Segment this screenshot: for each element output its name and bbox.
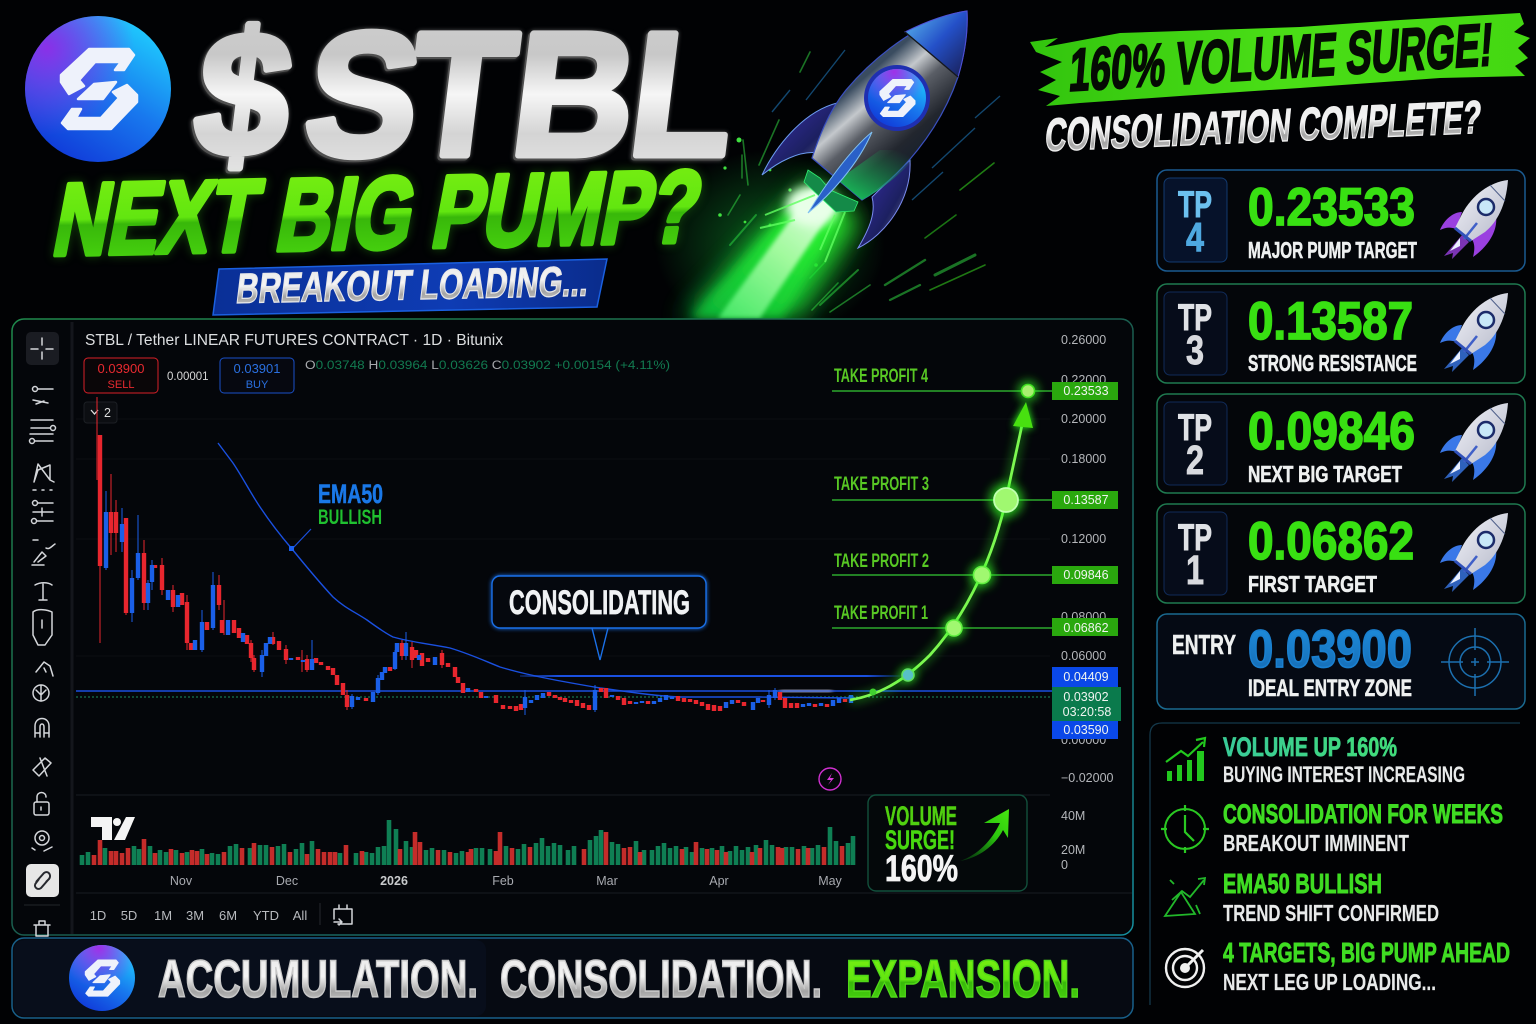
panel: TP1 target: TP xyxy=(1178,517,1212,558)
buy box: BUY xyxy=(246,379,269,391)
title: $STBL: $STBL xyxy=(185,0,747,193)
sell box: SELL xyxy=(108,379,134,391)
price tags xyxy=(1052,382,1121,739)
panel: entry: ENTRY xyxy=(1172,629,1236,660)
panel: TP4 target: MAJOR PUMP TARGET xyxy=(1248,237,1417,263)
panel: entry xyxy=(1157,614,1525,709)
range selector: 5D xyxy=(121,908,137,923)
key point: volume up xyxy=(1166,732,1465,787)
sell box: 0.03900 xyxy=(98,361,144,376)
price axis labels: 0.08000 xyxy=(1061,610,1106,624)
banner: accumulation consolidation expansion: EXPANSION. xyxy=(846,950,1080,1009)
callout: volume surge xyxy=(868,795,1027,891)
take profit levels: TAKE PROFIT 3 xyxy=(834,474,929,495)
key point: four targets: NEXT LEG UP LOADING... xyxy=(1223,969,1436,995)
candlesticks xyxy=(97,397,851,715)
panel: entry: 0.03900 xyxy=(1248,620,1412,679)
callout: volume surge: 160% xyxy=(885,848,958,889)
rocket exhaust flame xyxy=(680,180,860,318)
range selector: 1D xyxy=(90,908,106,923)
callout: consolidating xyxy=(492,576,706,660)
banner logo coin xyxy=(69,945,135,1011)
panel: TP3 target: STRONG RESISTANCE xyxy=(1248,350,1417,376)
panel: TP1 target: 0.06862 xyxy=(1248,512,1414,571)
panel: TP4 target: 0.23533 xyxy=(1248,178,1415,237)
price tags: 0.06862 xyxy=(1063,621,1109,635)
key point: consolidation: BREAKOUT IMMINENT xyxy=(1223,830,1409,856)
panel: TP1 target xyxy=(1157,504,1525,603)
key point: four targets xyxy=(1166,937,1510,995)
time axis: May xyxy=(818,874,843,888)
range selector xyxy=(90,903,352,925)
headline: next big pump: NEXT BIG PUMP? xyxy=(46,149,711,277)
price tags: 0.03590 xyxy=(1063,723,1109,737)
buy box xyxy=(220,358,294,393)
icon: blue rocket xyxy=(1440,293,1508,372)
panel: key points xyxy=(1150,723,1520,1005)
panel: TP2 target: NEXT BIG TARGET xyxy=(1248,461,1402,487)
price axis labels: 0.26000 xyxy=(1061,333,1106,347)
price axis labels: 0.20000 xyxy=(1061,412,1106,426)
buy box: 0.03901 xyxy=(234,361,280,376)
panel: TP4 target: 4 xyxy=(1186,214,1204,260)
take profit levels: TAKE PROFIT 4 xyxy=(834,366,928,387)
volume axis labels xyxy=(1061,809,1085,872)
volume bars xyxy=(82,820,853,865)
EMA50 bullish label xyxy=(318,479,383,529)
key point: EMA50 bullish xyxy=(1165,868,1439,926)
price axis labels: 0.06000 xyxy=(1061,649,1106,663)
price axis labels: 0.12000 xyxy=(1061,532,1106,546)
badge: breakout loading: BREAKOUT LOADING... xyxy=(234,258,591,312)
time axis: 2026 xyxy=(380,874,408,888)
price axis labels: −0.02000 xyxy=(1061,771,1114,785)
panel: TP3 target: TP xyxy=(1178,297,1212,338)
take profit levels: TAKE PROFIT 1 xyxy=(834,603,928,624)
time axis xyxy=(170,874,843,888)
banner: accumulation consolidation expansion: CONSOLIDATION. xyxy=(500,950,822,1009)
range selector: All xyxy=(293,908,307,923)
icon: crosshair xyxy=(1441,628,1509,696)
price axis labels xyxy=(1061,333,1114,785)
panel: TP2 target: 2 xyxy=(1186,437,1204,483)
panel: TP2 target xyxy=(1157,394,1525,493)
price tags: 0.13587 xyxy=(1063,493,1109,507)
price axis labels: 0.22000 xyxy=(1061,373,1106,387)
badge: breakout loading xyxy=(213,258,607,315)
key point: consolidation xyxy=(1161,799,1503,856)
TradingView logo xyxy=(91,817,135,840)
icon: purple rocket xyxy=(1440,180,1508,259)
banner: accumulation consolidation expansion xyxy=(12,938,1133,1018)
icon: blue rocket xyxy=(1440,513,1508,592)
panel: TP1 target: 1 xyxy=(1186,547,1204,593)
icon: blue rocket xyxy=(1440,403,1508,482)
icon: lightning alert xyxy=(819,768,841,790)
range selector: 6M xyxy=(219,908,237,923)
range selector: YTD xyxy=(253,908,279,923)
panel: TP4 target: TP xyxy=(1178,184,1212,225)
time axis: Nov xyxy=(170,874,193,888)
panel: TP3 target: 3 xyxy=(1186,327,1204,373)
panel: entry: IDEAL ENTRY ZONE xyxy=(1248,675,1412,702)
panel: TP2 target: TP xyxy=(1178,407,1212,448)
price tags: 03:20:58 xyxy=(1063,705,1111,719)
range selector: 1M xyxy=(154,908,172,923)
chart toolbar icons xyxy=(24,332,60,936)
panel: TP4 target xyxy=(1157,170,1525,271)
EMA50 bullish label: BULLISH xyxy=(318,506,382,529)
panel: TP1 target: FIRST TARGET xyxy=(1248,571,1377,597)
banner: accumulation consolidation expansion: ACCUMULATION. xyxy=(158,950,478,1009)
time axis: Dec xyxy=(276,874,298,888)
spread value: 0.00001 xyxy=(167,371,209,383)
range selector: 3M xyxy=(186,908,204,923)
header logo: STBL coin xyxy=(25,16,171,162)
OHLC readout: O0.03748 H0.03964 L0.03626 C0.03902 +0.00154 (+4.11%) xyxy=(305,360,670,372)
EMA50 line xyxy=(218,443,855,698)
panel: TP3 target: 0.13587 xyxy=(1248,292,1413,351)
price axis labels: 0.00000 xyxy=(1061,733,1106,747)
callout: volume surge: SURGE! xyxy=(885,825,955,855)
rocket xyxy=(762,11,967,248)
chart header: symbol title: STBL / Tether LINEAR FUTURES CONTRACT · 1D · Bitunix xyxy=(85,332,503,349)
price tags: 0.09846 xyxy=(1063,568,1109,582)
price tags: 0.04409 xyxy=(1063,670,1109,684)
panel: trading chart xyxy=(12,319,1133,936)
time axis: Mar xyxy=(596,874,618,888)
panel: TP2 target: 0.09846 xyxy=(1248,402,1415,461)
time axis: Feb xyxy=(492,874,514,888)
key point: EMA50 bullish: EMA50 BULLISH xyxy=(1223,868,1382,899)
volume axis labels: 0 xyxy=(1061,858,1068,872)
collapse indicator button xyxy=(84,402,117,423)
rocket glow and speed streaks xyxy=(655,50,1000,340)
horizontal price levels xyxy=(76,675,1052,697)
price axis labels: 0.18000 xyxy=(1061,452,1106,466)
collapse indicator button: 2 xyxy=(104,406,111,420)
price tags: 0.23533 xyxy=(1063,384,1109,398)
callout: volume surge: VOLUME xyxy=(885,801,957,831)
key point: EMA50 bullish: TREND SHIFT CONFIRMED xyxy=(1223,900,1439,926)
take profit levels xyxy=(832,366,1052,628)
sell box xyxy=(84,358,158,393)
projected breakout curve with arrow xyxy=(850,381,1038,700)
key point: volume up: VOLUME UP 160% xyxy=(1223,732,1397,762)
callout: consolidating: CONSOLIDATING xyxy=(509,584,690,622)
price tags: 0.03902 xyxy=(1063,690,1109,704)
volume axis labels: 40M xyxy=(1061,809,1085,823)
take profit levels: TAKE PROFIT 2 xyxy=(834,551,929,572)
EMA50 bullish label: EMA50 xyxy=(318,479,383,509)
volume axis labels: 20M xyxy=(1061,843,1085,857)
time axis: Apr xyxy=(709,874,729,888)
panel: TP3 target xyxy=(1157,284,1525,383)
